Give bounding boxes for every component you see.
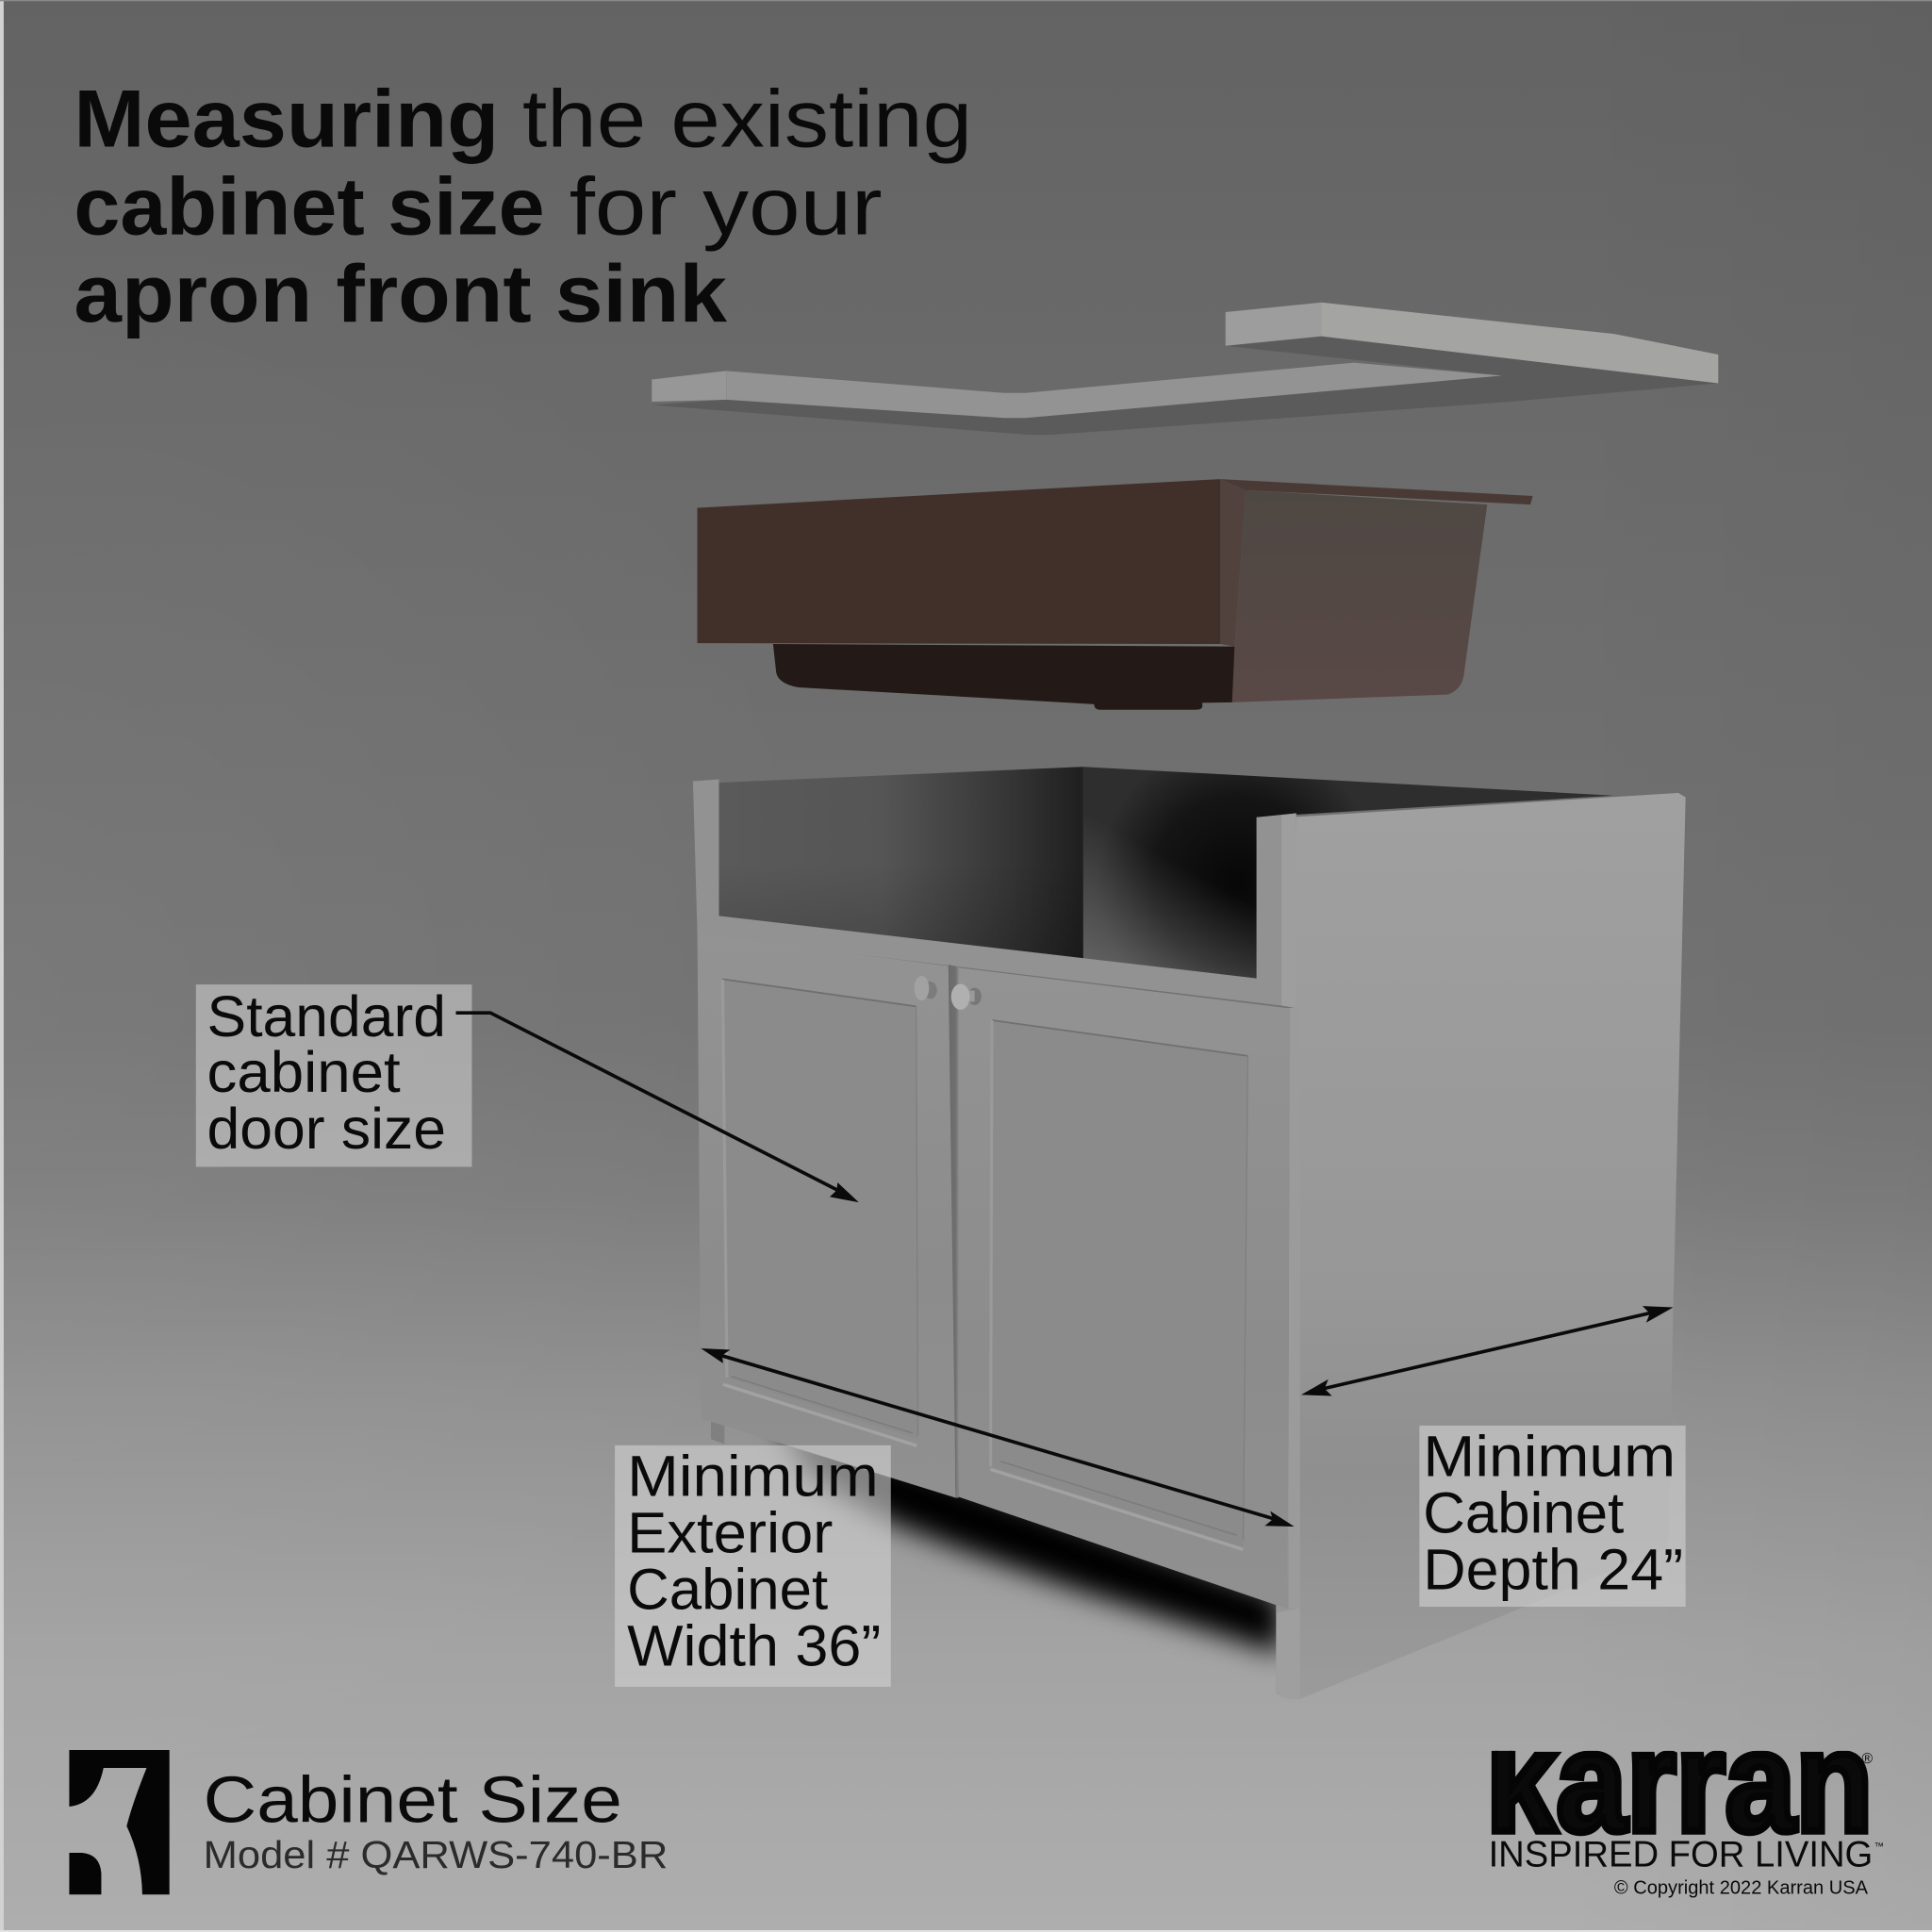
arrow: cabinet width <box>701 1348 1295 1527</box>
label: cabinet depth: Cabinet <box>1423 1481 1624 1546</box>
icon: R logo mark <box>69 1750 170 1894</box>
interior side wall <box>1083 767 1613 979</box>
label: cabinet width: Minimum <box>627 1444 879 1509</box>
label: cabinet depth: Minimum <box>1423 1424 1676 1489</box>
sink <box>697 479 1533 710</box>
interior back wall <box>718 767 1083 959</box>
brand logo <box>1492 1750 1883 1897</box>
brand logo: karran <box>1486 1703 1873 1862</box>
label: cabinet width: Width 36” <box>627 1614 881 1679</box>
knobs <box>915 976 982 1010</box>
footer heading: Cabinet Size <box>204 1763 622 1837</box>
side panel <box>1276 793 1686 1699</box>
left leg <box>711 1417 724 1445</box>
label: cabinet width <box>615 1444 891 1687</box>
arrow: door size <box>456 1013 859 1202</box>
frame right stile <box>1289 1008 1300 1610</box>
label: door size <box>196 984 471 1167</box>
title: cabinet size <box>74 161 545 252</box>
label: door size: door size <box>207 1097 446 1162</box>
left door <box>698 934 959 1497</box>
label: cabinet width: Cabinet <box>627 1558 828 1623</box>
title <box>74 74 972 339</box>
floor shadow <box>776 1417 1281 1654</box>
cabinet <box>693 767 1686 1699</box>
label: cabinet width: Exterior <box>627 1501 833 1566</box>
brand logo: ® <box>1862 1751 1874 1767</box>
footer heading <box>204 1763 668 1876</box>
face frame <box>693 780 1296 1007</box>
right door <box>959 967 1290 1609</box>
label: cabinet depth <box>1419 1424 1686 1607</box>
title: for your <box>570 161 883 252</box>
countertop <box>652 303 1718 435</box>
arrow: cabinet depth <box>1301 1306 1674 1396</box>
post <box>1277 1608 1300 1699</box>
title: the existing <box>522 74 972 165</box>
footer heading: Model # QARWS-740-BR <box>204 1833 668 1876</box>
label: door size: Standard <box>207 984 446 1049</box>
label: cabinet depth: Depth 24” <box>1423 1538 1683 1603</box>
brand logo: INSPIRED FOR LIVING <box>1489 1835 1873 1875</box>
brand logo: ™ <box>1874 1841 1884 1852</box>
label: door size: cabinet <box>207 1040 401 1105</box>
title: Measuring <box>74 74 499 165</box>
title: apron front sink <box>74 249 728 339</box>
brand logo: © Copyright 2022 Karran USA <box>1614 1877 1869 1898</box>
